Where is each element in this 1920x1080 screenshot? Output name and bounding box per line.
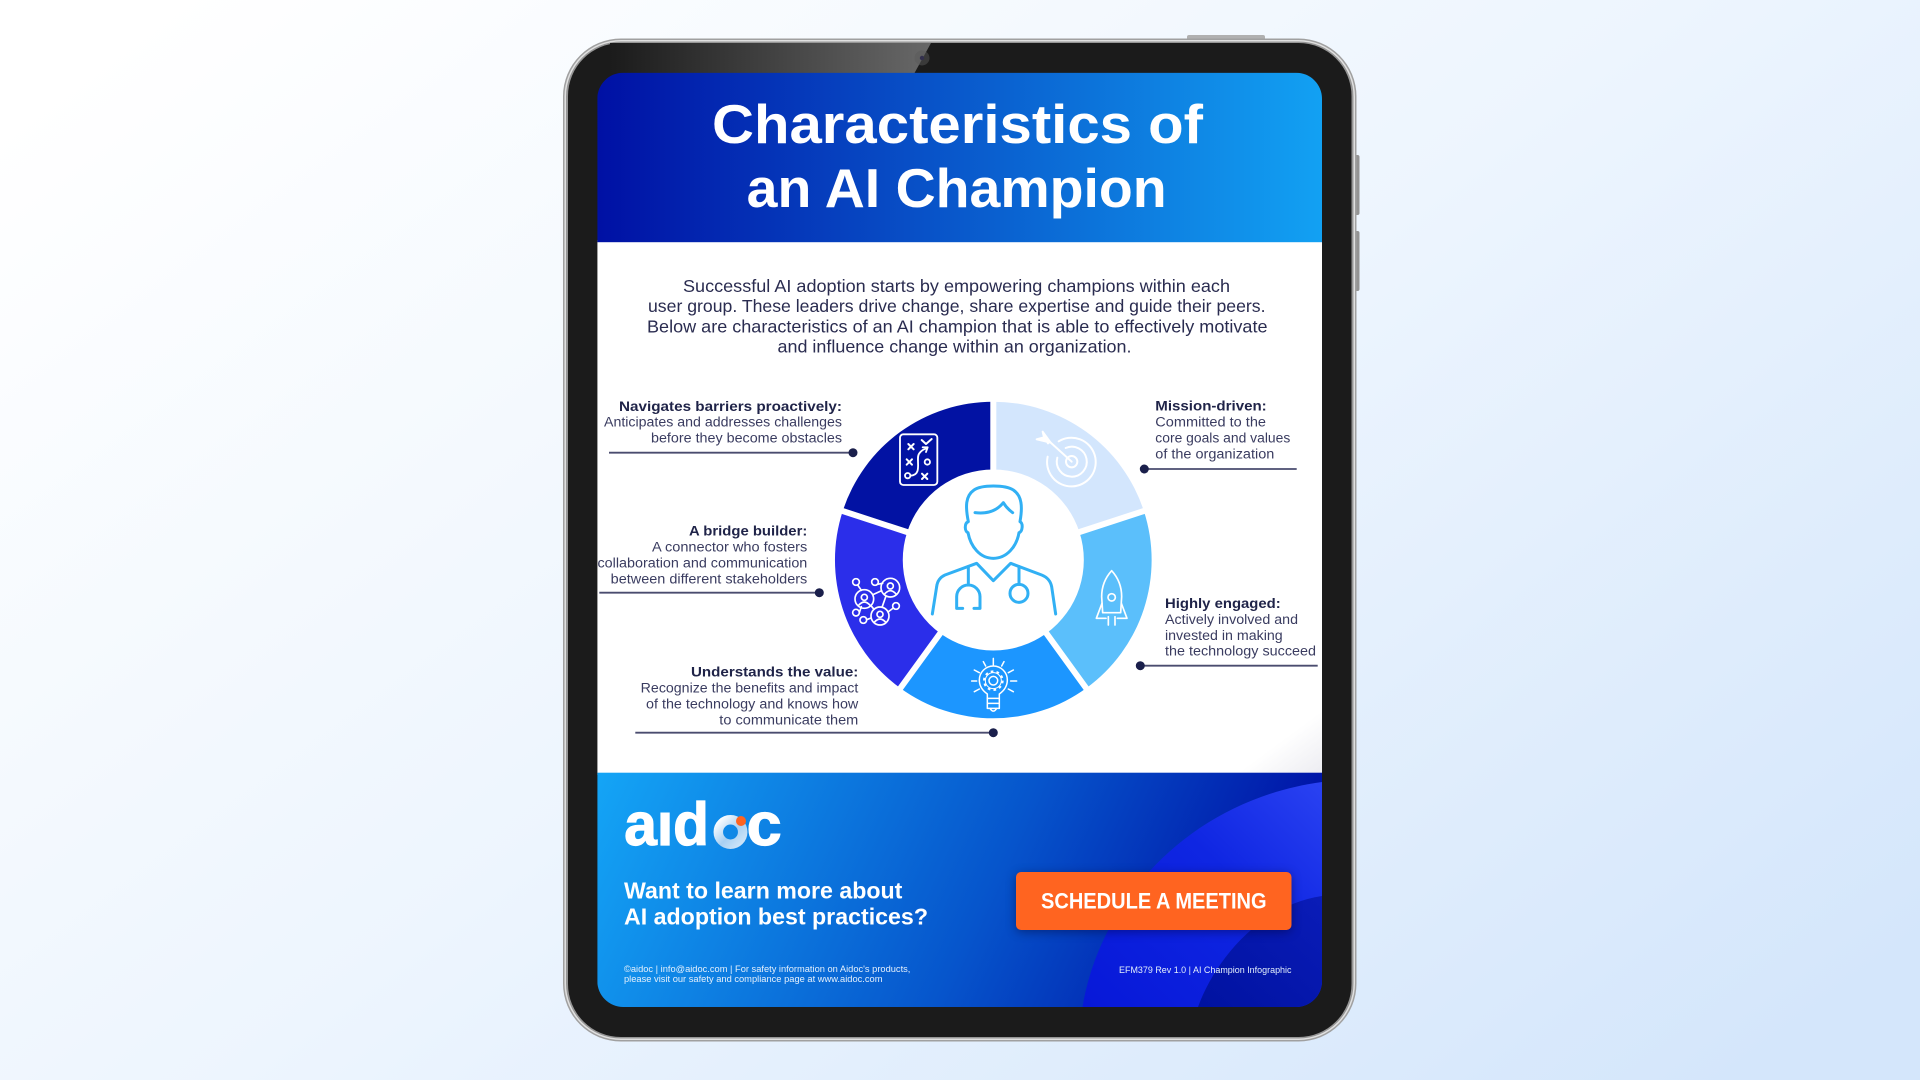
intro paragraph: Successful AI adoption starts by empowering champions within each: [683, 276, 1230, 296]
callout: understands the value: of the technology and knows how: [646, 696, 859, 711]
callout: mission-driven: Mission-driven:: [1155, 399, 1267, 414]
icon: target with arrow: [1037, 432, 1096, 486]
callout: a bridge builder: A connector who fosters: [652, 540, 808, 555]
header band with title: [597, 73, 1322, 242]
legal footnote: [624, 964, 910, 984]
callout: mission-driven: [1140, 399, 1297, 474]
icon: people network: [853, 578, 900, 625]
callout: mission-driven: of the organization: [1155, 446, 1274, 461]
intro paragraph: and influence change within an organization.: [778, 336, 1132, 356]
icon: lightbulb with gear: [972, 658, 1017, 711]
callout: navigates barriers proactively: Navigates barriers proactively:: [619, 399, 842, 414]
donut chart of five characteristics: [835, 395, 1152, 718]
callout: highly engaged: Highly engaged:: [1165, 596, 1281, 611]
header band with title: an AI Champion: [747, 157, 1167, 219]
callout: understands the value: Recognize the benefits and impact: [641, 681, 859, 696]
footer heading: [624, 877, 928, 929]
callout: mission-driven: core goals and values: [1155, 431, 1291, 446]
callout: highly engaged: [1136, 596, 1318, 670]
intro paragraph: Below are characteristics of an AI champion that is able to effectively motivate: [647, 316, 1268, 336]
legal footnote: please visit our safety and compliance page at www.aidoc.com: [624, 974, 882, 984]
intro paragraph: user group. These leaders drive change, share expertise and guide their peers.: [648, 296, 1266, 316]
segment: highly engaged: [1046, 511, 1152, 688]
tablet device frame: [563, 35, 1360, 1042]
segment: bridge builder: [835, 511, 940, 688]
button: schedule a meeting: [1016, 872, 1292, 930]
logo: aidoc: c: [747, 791, 782, 858]
logo: aidoc: aıd: [624, 791, 709, 858]
callout: highly engaged: Actively involved and: [1165, 612, 1298, 627]
callout: understands the value: [635, 665, 998, 737]
intro paragraph: [647, 276, 1268, 356]
callout: understands the value: to communicate them: [719, 712, 858, 727]
infographic screen: [597, 73, 1322, 1007]
callout: a bridge builder: A bridge builder:: [689, 524, 807, 539]
callout: navigates barriers proactively: before they become obstacles: [651, 431, 842, 446]
segment: mission-driven: [993, 402, 1144, 532]
callout: a bridge builder: between different stakeholders: [611, 571, 808, 586]
footer heading: Want to learn more about: [624, 877, 903, 903]
icon: doctor with stethoscope: [932, 486, 1056, 614]
callout: understands the value: Understands the value:: [691, 665, 858, 680]
button: schedule a meeting: SCHEDULE A MEETING: [1041, 888, 1267, 913]
icon: playbook with game plan: [900, 434, 937, 485]
callout: mission-driven: Committed to the: [1155, 415, 1266, 430]
document reference: EFM379 Rev 1.0 | AI Champion Infographic: [1119, 965, 1292, 975]
segment: understands the value: [900, 633, 1086, 718]
icon: rocket: [1096, 571, 1127, 625]
logo: aidoc: [625, 800, 780, 849]
footer heading: AI adoption best practices?: [624, 903, 928, 929]
callout: a bridge builder: collaboration and communication: [598, 555, 807, 570]
callout: navigates barriers proactively: Anticipates and addresses challenges: [604, 415, 842, 430]
callout: a bridge builder: [598, 524, 824, 597]
callout: highly engaged: the technology succeed: [1165, 644, 1316, 659]
callout: navigates barriers proactively: [604, 399, 858, 457]
callout: highly engaged: invested in making: [1165, 628, 1283, 643]
header band with title: Characteristics of: [712, 93, 1204, 155]
legal footnote: ©aidoc | info@aidoc.com | For safety information on Aidoc's products,: [624, 964, 910, 974]
footer panel: [597, 773, 1322, 1007]
segment: navigates barriers: [843, 402, 993, 532]
